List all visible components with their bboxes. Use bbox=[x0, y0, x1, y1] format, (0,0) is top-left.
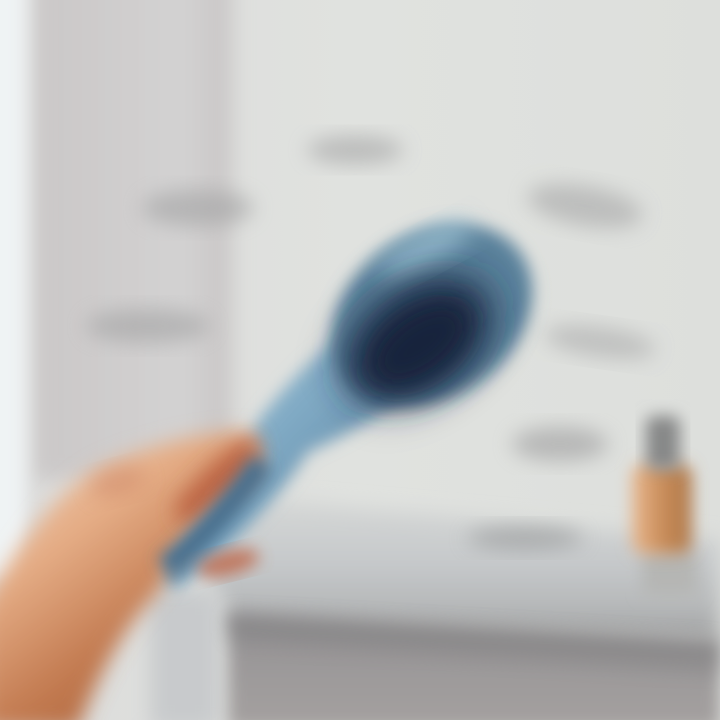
knuckle tint bbox=[87, 461, 149, 503]
shelf top bbox=[200, 500, 720, 640]
bright window strip bbox=[0, 0, 26, 580]
smudge: upper left label bbox=[142, 190, 254, 226]
wrist and palm bbox=[0, 432, 260, 720]
brush head rim bbox=[296, 186, 568, 444]
smudge: upper right label bbox=[524, 176, 646, 236]
blurred label smudges bbox=[86, 136, 658, 461]
cabinet dark band bbox=[228, 612, 720, 672]
hand bbox=[0, 432, 262, 720]
bottle body bbox=[632, 464, 692, 554]
brush head highlight bbox=[373, 213, 477, 287]
bristle core bbox=[353, 284, 487, 406]
brush head bristles bbox=[321, 250, 515, 430]
bottle bbox=[632, 416, 698, 596]
lower finger bbox=[194, 544, 262, 582]
fingertip red bbox=[175, 438, 257, 525]
lower left pale post bbox=[150, 590, 220, 720]
bottle cap bbox=[646, 416, 680, 470]
hairbrush bbox=[155, 186, 568, 590]
shelf bbox=[150, 500, 720, 720]
handle grip in hand bbox=[165, 462, 262, 568]
brush handle bbox=[155, 330, 400, 590]
left wall panel bbox=[34, 0, 232, 480]
smudge: mid left label bbox=[86, 309, 210, 343]
cabinet body bbox=[228, 612, 720, 720]
smudge: top label bbox=[307, 136, 403, 164]
shelf label smudge bbox=[467, 526, 583, 550]
bottle base reflection bbox=[642, 552, 698, 596]
smudge: mid right label bbox=[542, 319, 658, 365]
smudge: lower right label bbox=[512, 427, 608, 461]
